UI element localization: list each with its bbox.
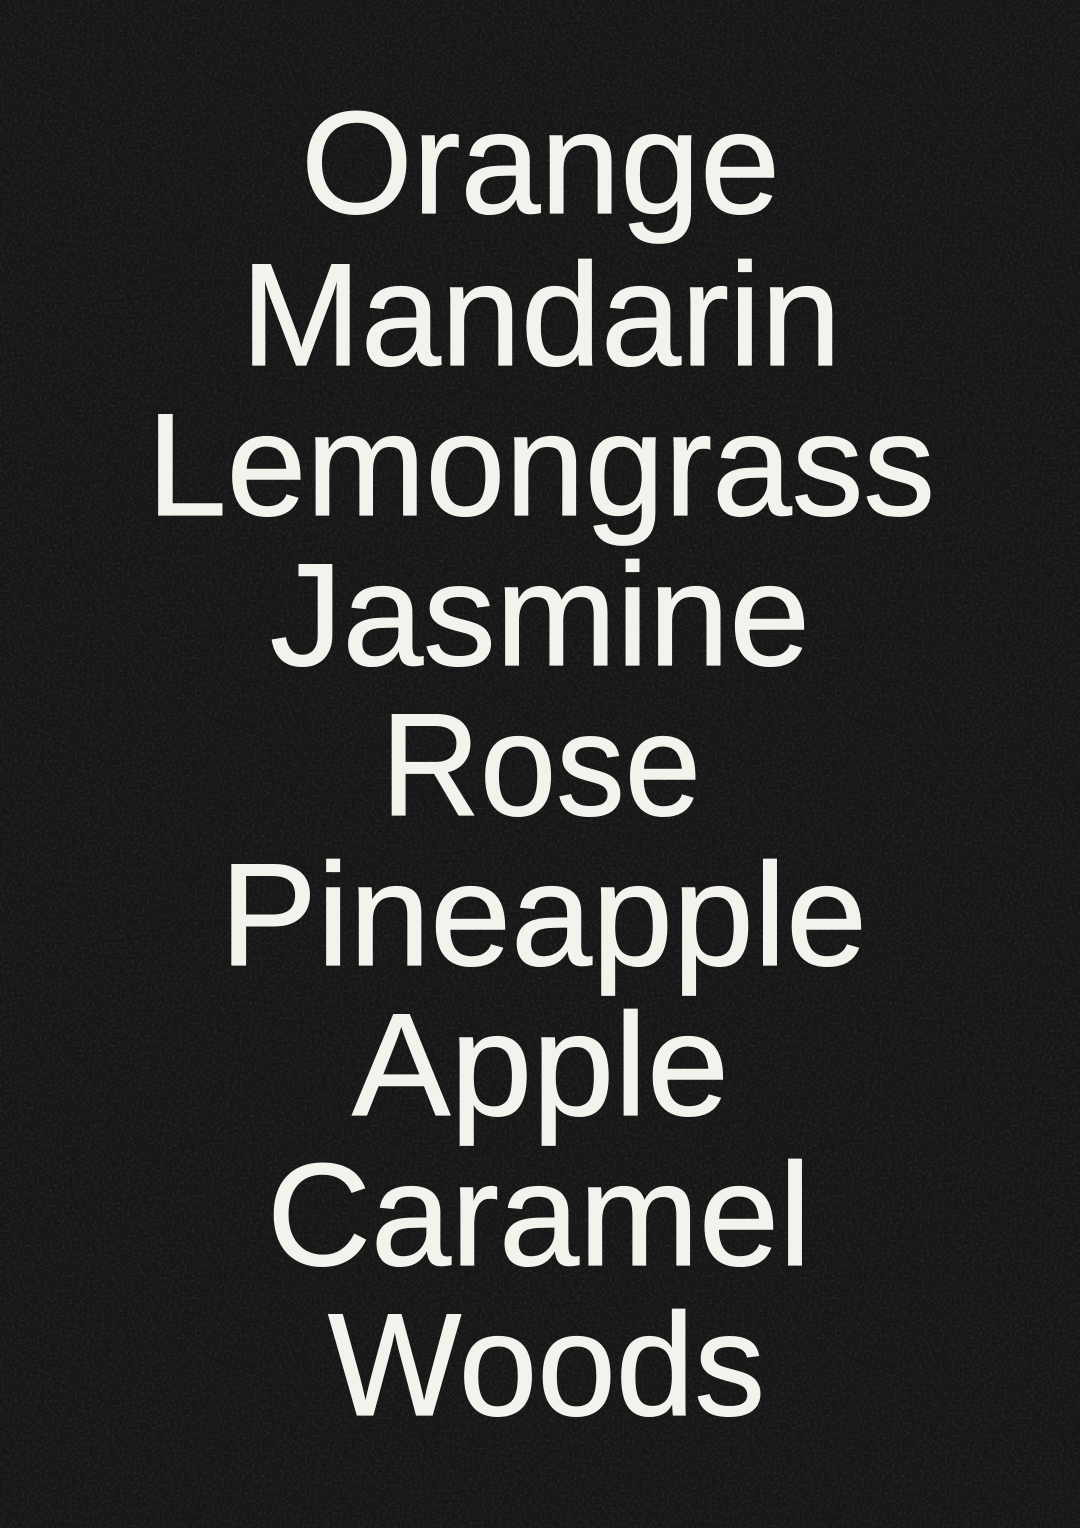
word: Mandarin: Mandarin <box>241 233 841 396</box>
word: Lemongrass: Lemongrass <box>147 383 935 546</box>
word: Woods: Woods <box>328 1283 765 1446</box>
word: Caramel: Caramel <box>267 1133 811 1296</box>
word: Pineapple: Pineapple <box>220 833 867 996</box>
word: Orange: Orange <box>301 81 780 244</box>
word: Apple: Apple <box>352 983 729 1146</box>
word list <box>147 81 935 1446</box>
word: Rose: Rose <box>381 683 701 846</box>
word: Jasmine: Jasmine <box>270 533 810 696</box>
